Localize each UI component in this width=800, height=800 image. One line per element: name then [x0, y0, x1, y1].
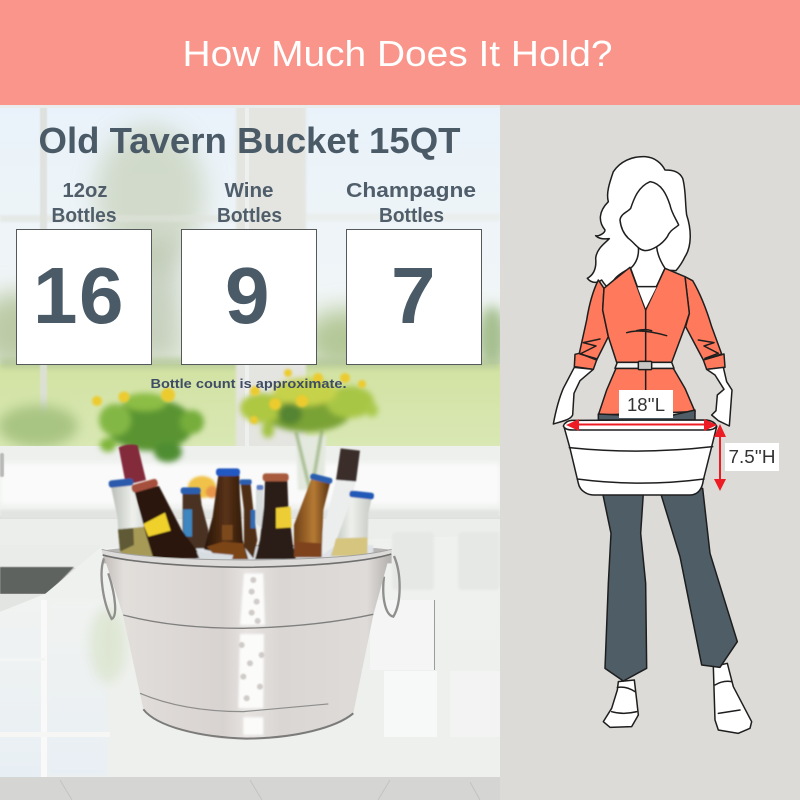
- right cuff: [703, 354, 725, 369]
- panel: kitchen window background photo: [0, 105, 506, 800]
- tub rim: [563, 420, 717, 430]
- flowers and vase behind the bucket: [92, 369, 378, 498]
- left cuff: [574, 353, 597, 369]
- label: 7.5 inch height: 7.5''H: [728, 447, 776, 467]
- icon: woman figure, upper body: [553, 157, 732, 426]
- left shoe: [603, 680, 638, 727]
- right shoe: [713, 663, 752, 733]
- label: 7.5 inch height: [725, 443, 779, 471]
- column label: 12oz Bottles: Bottles: [52, 205, 116, 227]
- steel body: [103, 554, 390, 740]
- right sleeve: [685, 277, 722, 360]
- count box: 16: [16, 230, 152, 364]
- belt buckle: [638, 361, 652, 370]
- ring handle left: [102, 558, 115, 619]
- column label: Champagne Bottles: Bottles: [379, 205, 444, 227]
- icon: woman figure, legs and tub: [563, 410, 752, 733]
- bands: [123, 614, 373, 628]
- left hand and arm: [553, 367, 593, 424]
- right leg: [661, 488, 737, 667]
- camisole: [637, 287, 657, 308]
- left sleeve: [579, 280, 608, 360]
- count box: 7: 7: [391, 251, 436, 340]
- right hand and arm: [707, 367, 732, 426]
- ring handle right: [383, 556, 400, 617]
- panel: right grey background: [500, 105, 800, 800]
- hips band: [598, 410, 695, 420]
- photo: bucket filled with bottles: [102, 444, 400, 740]
- left leg: [603, 493, 647, 681]
- dimension arrow: length: [566, 419, 717, 431]
- column label: Champagne Bottles: Champagne: [346, 180, 476, 202]
- count box: 7: [346, 230, 482, 364]
- column label: Wine Bottles: Bottles: [217, 205, 282, 227]
- hair: [587, 157, 690, 288]
- rim: [102, 549, 392, 567]
- face: [620, 182, 679, 251]
- label: 18 inch length: [619, 390, 673, 418]
- blouse body: [603, 267, 689, 362]
- heading: Old Tavern Bucket 15QT: Old Tavern Bucket 15QT: [38, 120, 461, 161]
- hammered highlight: [238, 573, 265, 735]
- tub bands: [569, 447, 713, 483]
- column label: Champagne Bottles: [346, 180, 476, 227]
- neck: [631, 247, 665, 310]
- bottles group: [108, 444, 374, 563]
- blouse peplum: [598, 368, 695, 415]
- column label: Wine Bottles: Wine: [224, 180, 274, 202]
- blouse center seam and gathers: [580, 310, 718, 390]
- count box: 9: [182, 230, 316, 364]
- belt: [615, 362, 674, 368]
- column label: 12oz Bottles: 12oz: [62, 180, 108, 202]
- panel: salmon header band: [0, 0, 800, 105]
- column label: 12oz Bottles: [52, 180, 116, 227]
- dimension arrow: height: [714, 424, 726, 491]
- tub body: [564, 427, 717, 495]
- note: bottle count is approximate: Bottle count is approximate.: [150, 376, 346, 391]
- count box: 9: 9: [225, 251, 270, 340]
- label: 18 inch length: 18''L: [627, 395, 665, 415]
- column label: Wine Bottles: [217, 180, 282, 227]
- hammered dimples: [239, 577, 265, 701]
- title: How Much Does It Hold?: How Much Does It Hold?: [182, 33, 612, 74]
- bucket interior: [103, 545, 392, 563]
- count box: 16: 16: [33, 251, 124, 340]
- shoe details: [612, 681, 740, 713]
